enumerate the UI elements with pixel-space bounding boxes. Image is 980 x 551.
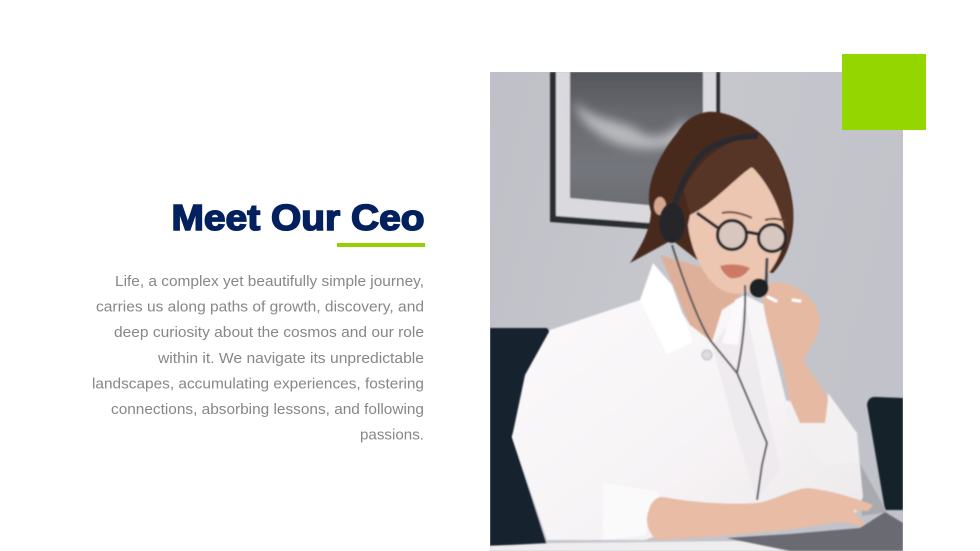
body text: landscapes, accumulating experiences, fostering xyxy=(92,375,424,392)
body text: carries us along paths of growth, discovery, and xyxy=(96,299,424,316)
cables xyxy=(672,245,767,500)
eyebrows xyxy=(722,212,785,221)
office wall xyxy=(490,72,903,551)
left cuff xyxy=(620,498,655,537)
body text: passions. xyxy=(360,427,424,444)
body text xyxy=(92,273,424,444)
face xyxy=(688,167,786,294)
microphone arm xyxy=(766,258,767,285)
fingernails xyxy=(768,297,800,301)
title: Meet Our Ceo xyxy=(172,197,424,238)
ear xyxy=(654,197,666,215)
left chair xyxy=(490,328,555,546)
ear cup xyxy=(659,203,685,243)
rolled cuff xyxy=(790,393,857,433)
photo: CEO wearing headset at laptop xyxy=(490,72,903,551)
collar right xyxy=(722,296,744,344)
woman xyxy=(512,112,873,540)
fringe xyxy=(684,135,793,250)
collar xyxy=(640,263,693,355)
body text: Life, a complex yet beautifully simple journey, xyxy=(115,273,424,290)
headset band xyxy=(672,136,758,215)
forearm and typing hand xyxy=(647,488,873,540)
shirt xyxy=(512,268,863,540)
shirt shadow folds xyxy=(714,316,760,408)
laptop screen back xyxy=(860,464,887,516)
lips xyxy=(720,264,750,278)
hair back xyxy=(630,112,793,273)
button xyxy=(702,350,712,360)
laptop xyxy=(727,512,903,551)
neck xyxy=(660,255,745,345)
body text: connections, absorbing lessons, and following xyxy=(111,401,424,418)
slide xyxy=(93,54,926,551)
upper hand and wrist xyxy=(763,282,828,423)
right chair xyxy=(867,397,903,510)
desk xyxy=(490,541,903,551)
framed picture xyxy=(550,72,720,232)
body text: deep curiosity about the cosmos and our role xyxy=(114,324,424,341)
body text: within it. We navigate its unpredictable xyxy=(157,350,424,367)
glasses xyxy=(697,213,786,252)
microphone xyxy=(750,278,768,298)
title underline xyxy=(337,243,425,247)
green accent square xyxy=(842,54,926,130)
